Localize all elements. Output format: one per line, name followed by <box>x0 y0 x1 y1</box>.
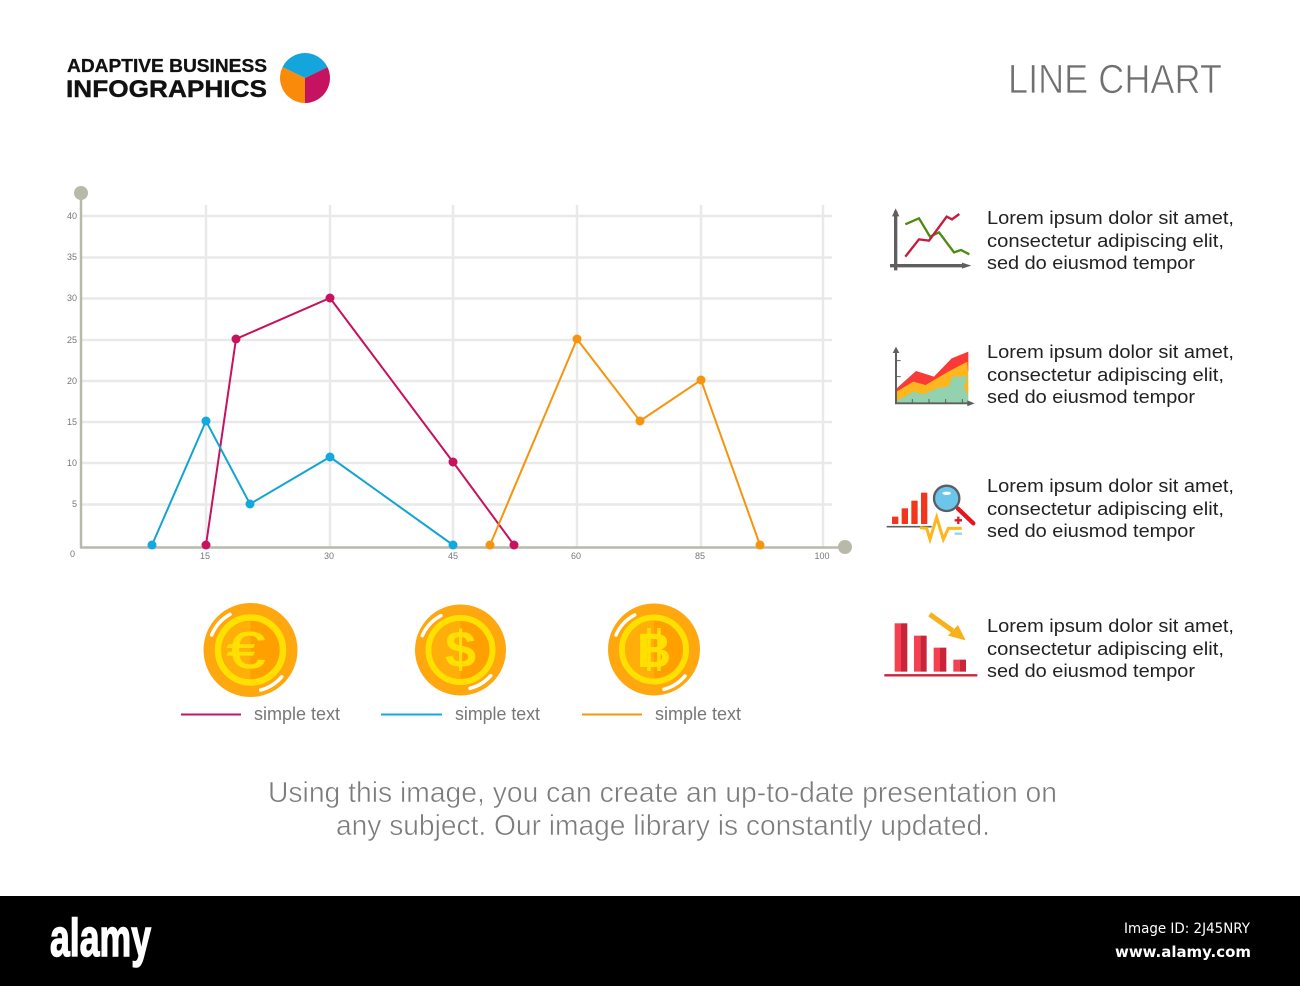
series: magenta <box>202 294 518 550</box>
text block 4: sed do eiusmod tempor <box>987 660 1195 681</box>
x axis labels: 85 <box>695 551 705 561</box>
legend item: orange: simple text <box>655 704 741 724</box>
y axis labels: 20 <box>67 376 77 386</box>
icon: euro coin <box>204 603 298 697</box>
text block 1 <box>987 207 1234 273</box>
watermark bar <box>0 896 1300 986</box>
legend <box>181 704 741 724</box>
series: orange <box>486 334 764 550</box>
y axis labels: 40 <box>67 211 77 221</box>
text block 1: sed do eiusmod tempor <box>987 252 1195 273</box>
caption <box>268 777 1057 842</box>
logo: ADAPTIVE BUSINESS <box>67 55 267 76</box>
title: LINE CHART <box>1008 56 1222 102</box>
text block 2: Lorem ipsum dolor sit amet, <box>987 341 1234 362</box>
y axis labels <box>67 211 77 559</box>
legend item: magenta: simple text <box>254 704 340 724</box>
text block 4 <box>987 615 1234 681</box>
icon: bitcoin coin: B <box>637 625 671 678</box>
text block 3: sed do eiusmod tempor <box>987 520 1195 541</box>
icon: dollar coin <box>415 604 506 696</box>
logo <box>66 53 330 103</box>
x axis labels: 100 <box>814 551 830 561</box>
icon: line chart <box>890 208 971 270</box>
text block 2: consectetur adipiscing elit, <box>987 364 1224 385</box>
x axis labels <box>200 551 830 561</box>
logo: INFOGRAPHICS <box>66 76 267 103</box>
caption: Using this image, you can create an up-to-date presentation on <box>268 777 1057 809</box>
x axis labels: 60 <box>571 551 581 561</box>
watermark logo: alamy <box>50 909 151 968</box>
x axis labels: 45 <box>448 551 458 561</box>
y axis labels: 35 <box>67 252 77 262</box>
text block 3 <box>987 475 1234 541</box>
text block 4: consectetur adipiscing elit, <box>987 638 1224 659</box>
y axis labels: 0 <box>70 549 75 559</box>
icon: euro coin: € <box>226 622 266 680</box>
axes <box>74 186 852 554</box>
icon: area chart <box>893 347 975 406</box>
line chart <box>67 186 852 561</box>
y axis labels: 10 <box>67 458 77 468</box>
icon: logo pie <box>280 53 330 103</box>
text block 3: consectetur adipiscing elit, <box>987 498 1224 519</box>
text block 1: consectetur adipiscing elit, <box>987 230 1224 251</box>
text block 3: Lorem ipsum dolor sit amet, <box>987 475 1234 496</box>
text block 1: Lorem ipsum dolor sit amet, <box>987 207 1234 228</box>
icon: bitcoin coin <box>608 604 700 696</box>
text block 2: sed do eiusmod tempor <box>987 386 1195 407</box>
image id: Image ID: 2J45NRY <box>1124 921 1250 937</box>
icon: falling bars <box>884 614 977 675</box>
text block 4: Lorem ipsum dolor sit amet, <box>987 615 1234 636</box>
x axis labels: 30 <box>324 551 334 561</box>
legend item: blue: simple text <box>455 704 540 724</box>
icon: analytics magnifier <box>887 486 973 539</box>
y axis labels: 30 <box>67 293 77 303</box>
y axis labels: 25 <box>67 335 77 345</box>
caption: any subject. Our image library is constantly updated. <box>336 810 990 842</box>
y axis labels: 5 <box>72 499 77 509</box>
website: www.alamy.com <box>1115 943 1251 961</box>
icon: dollar coin: $ <box>445 621 476 679</box>
series: blue <box>148 416 458 550</box>
text block 2 <box>987 341 1234 407</box>
x axis labels: 15 <box>200 551 210 561</box>
y axis labels: 15 <box>67 417 77 427</box>
